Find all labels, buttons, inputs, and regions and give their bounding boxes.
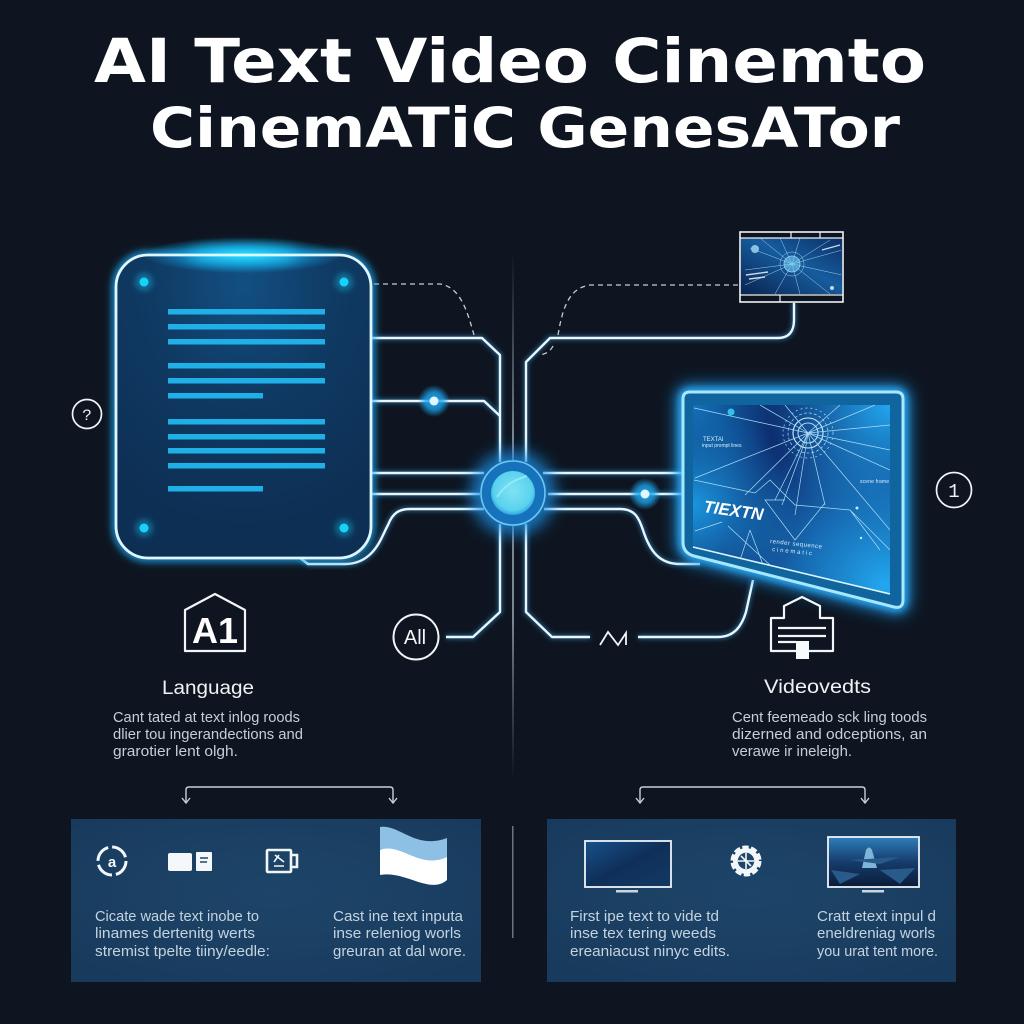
text block: video description: dizerned and odceptions, an <box>732 727 927 743</box>
text block: right column: inse releniog worls <box>333 926 461 942</box>
icon: numbered circle: 1 <box>948 481 960 503</box>
monitor screen <box>693 405 890 595</box>
icon: AI house badge: A1 <box>192 610 238 651</box>
icon: circular badge <box>98 847 126 875</box>
screen micro text: render sequence <box>770 539 823 550</box>
text block: video description: verawe ir ineleigh. <box>732 744 852 760</box>
icon: circular badge: a <box>108 854 117 871</box>
title <box>94 26 926 160</box>
text lines <box>168 309 325 492</box>
card outline <box>116 255 371 558</box>
panel: text document card <box>116 237 371 558</box>
node: right signal dot <box>629 478 661 510</box>
screen cracks <box>694 405 890 570</box>
panel: left feature strip <box>71 819 481 982</box>
thumbnail burst <box>745 238 842 294</box>
text block: left column: inse tex tering weeds <box>570 926 716 942</box>
text block: right column: Cast ine text inputa <box>333 909 464 925</box>
text block: left column: ereaniacust ninyc edits. <box>570 944 730 960</box>
icon: All circle: All <box>404 627 426 649</box>
text block: right column: greuran at dal wore. <box>333 944 466 960</box>
center bottom divider <box>512 826 514 938</box>
connector circuit lines <box>300 284 794 637</box>
top glow <box>143 237 343 273</box>
icon: video document house <box>771 597 833 659</box>
title: CinemATiC GenesATor <box>150 96 900 160</box>
heading: Videovedts: Videovedts <box>764 677 871 698</box>
screen micro text <box>702 437 889 557</box>
text block: video description <box>732 710 927 760</box>
screen micro text: scene frame <box>860 479 889 485</box>
node: left signal dot <box>418 385 450 417</box>
icon: AI house badge <box>185 594 245 651</box>
text block: language description: Cant tated at text inlog roods <box>113 710 300 726</box>
screen micro text: cinematic <box>772 547 812 557</box>
center vertical divider <box>512 250 514 780</box>
icon: wave flag <box>380 827 447 885</box>
text block: left column: First ipe text to vide td <box>570 909 719 925</box>
screen micro text: TEXTAI <box>703 437 724 443</box>
panel: right feature strip <box>547 819 956 982</box>
arrow bracket: left <box>182 787 397 803</box>
title: AI Text Video Cinemto <box>94 26 926 97</box>
text block: left column: stremist tpelte tiiny/eedle: <box>95 944 270 960</box>
text block: video description: Cent feemeado sck ling toods <box>732 710 927 726</box>
text block: right column: you urat tent more. <box>817 944 938 960</box>
heading: Language: Language <box>162 678 254 699</box>
text block: right column <box>817 909 938 960</box>
icon: card and note <box>168 852 212 871</box>
icon: All circle <box>394 614 438 660</box>
text block: language description: dlier tou ingerandections and <box>113 727 303 743</box>
icon: wave signal <box>600 632 626 645</box>
text block: right column: Cratt etext inpul d <box>817 909 936 925</box>
icon: image monitor <box>828 837 919 892</box>
icon: gear brain <box>733 848 759 874</box>
icon: blank monitor <box>585 841 671 892</box>
text block: right column <box>333 909 466 960</box>
text block: left column <box>95 909 270 960</box>
icon: question mark circle <box>72 400 102 428</box>
text block: left column: Cicate wade text inobe to <box>95 909 259 925</box>
icon: question mark circle: ? <box>82 407 92 425</box>
icon: mug <box>267 850 297 872</box>
thumbnail video frame <box>740 232 843 302</box>
panel: glowing video monitor <box>683 392 903 607</box>
text block: language description: grarotier lent olgh. <box>113 744 238 760</box>
top glow core <box>188 249 298 261</box>
arrow bracket: right <box>636 787 869 803</box>
central hub orb <box>471 451 555 535</box>
text block: left column: linames dertenitg werts <box>95 926 255 942</box>
corner dots <box>135 273 353 537</box>
monitor bezel lines <box>693 547 890 594</box>
text block: left column <box>570 909 730 960</box>
icon: numbered circle <box>936 472 972 508</box>
screen micro text: input prompt lines <box>702 443 742 449</box>
text block: right column: eneldreniag worls <box>817 926 935 942</box>
screen title: TIEXTN <box>702 497 765 524</box>
text block: language description <box>113 710 303 760</box>
